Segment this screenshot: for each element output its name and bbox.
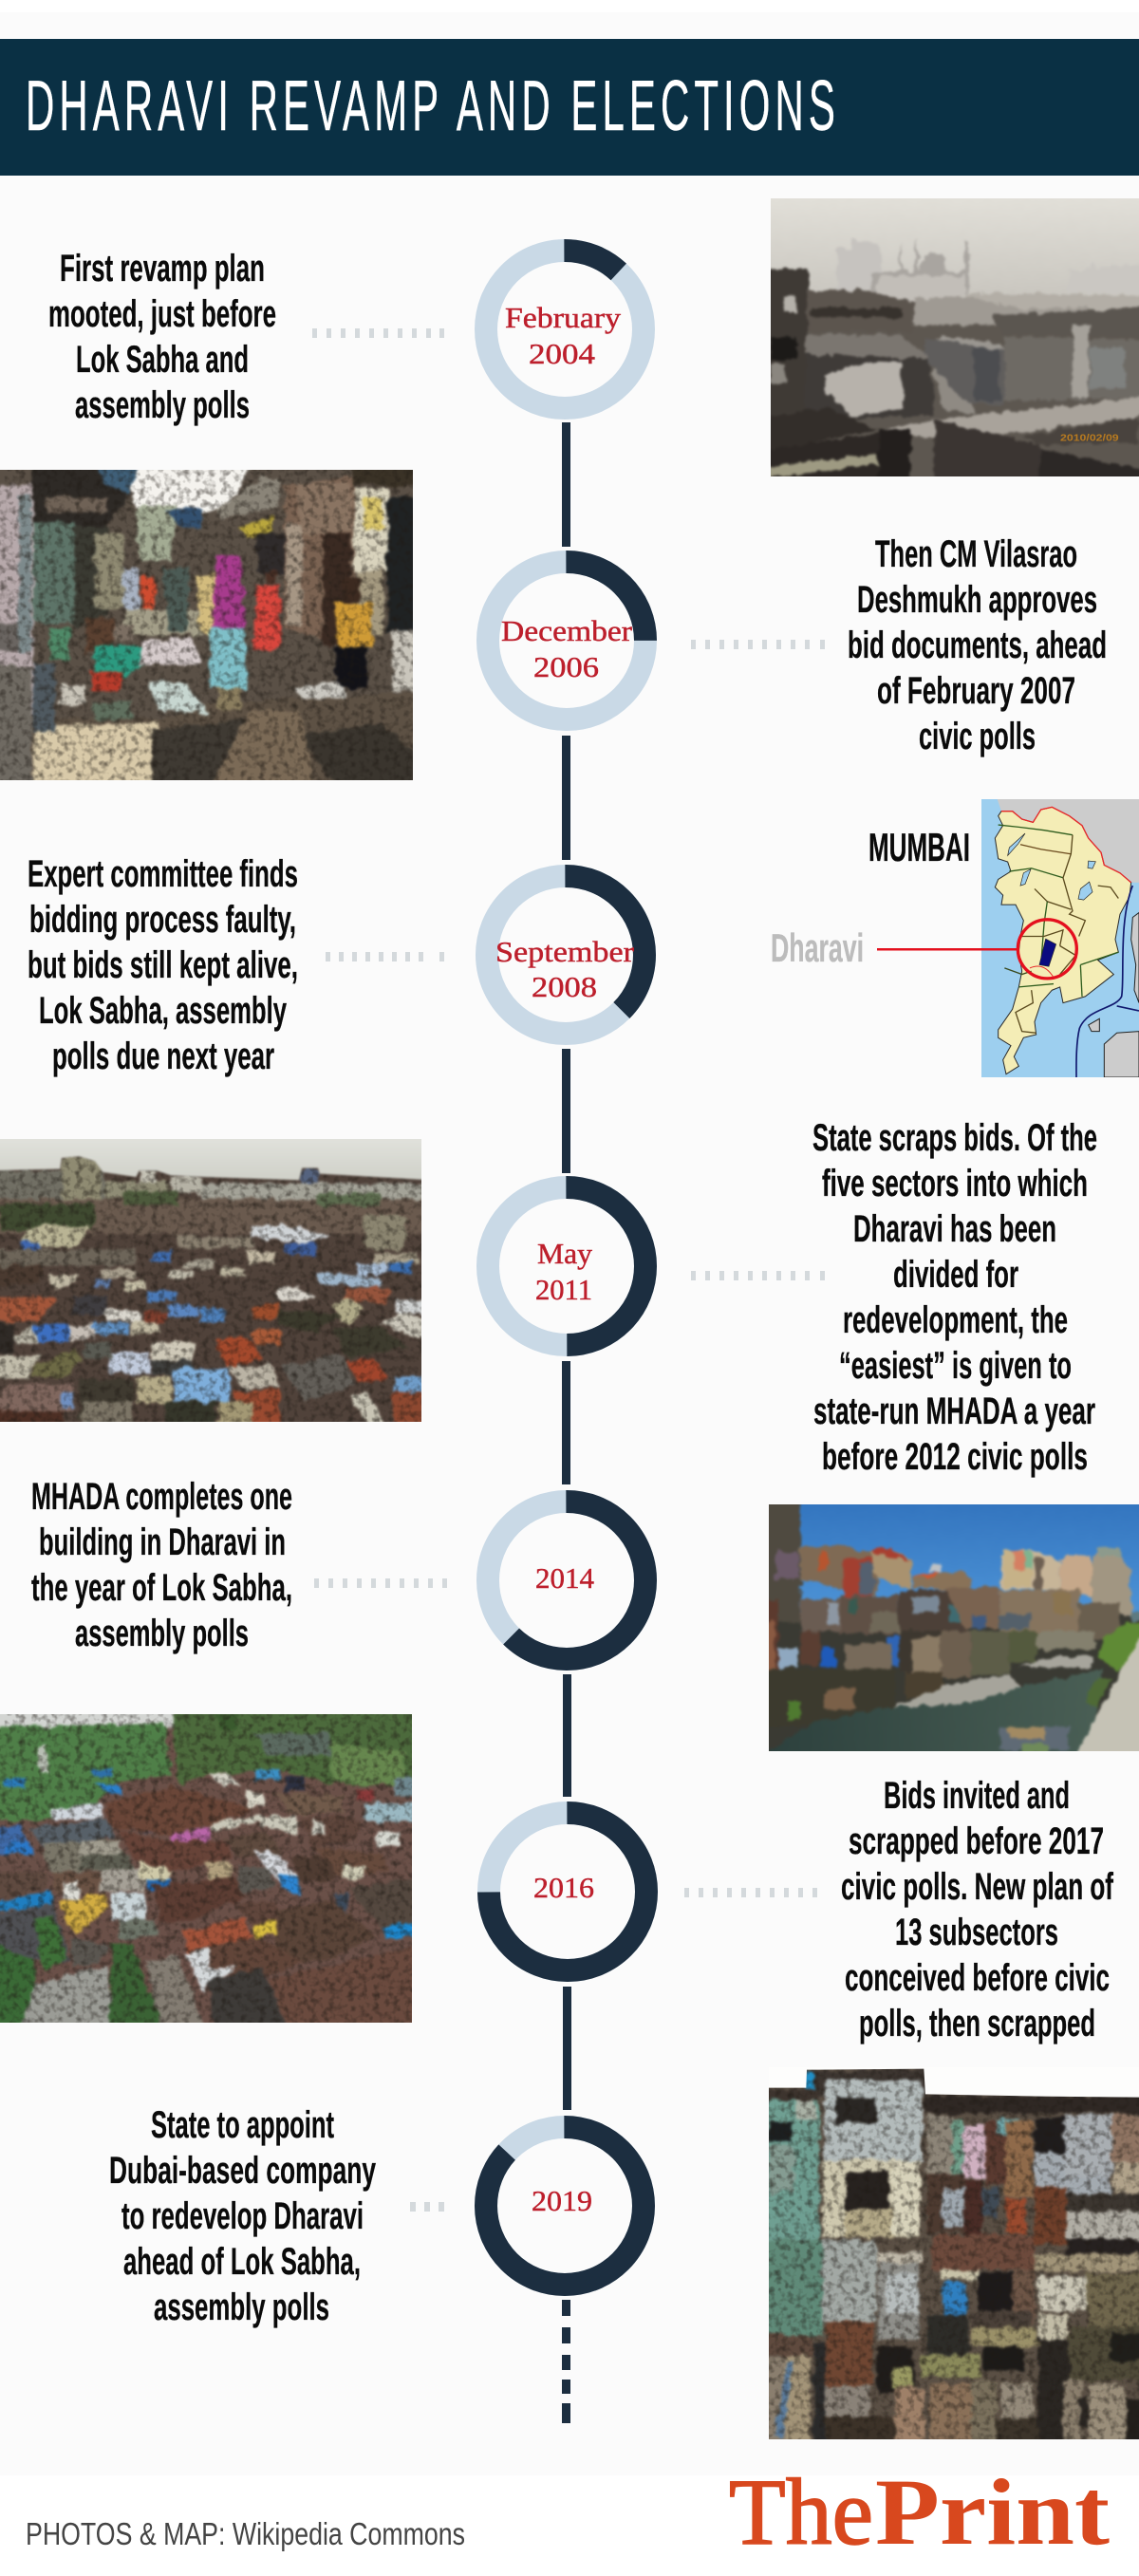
text block: 2014: building in Dharavi in [39, 1521, 286, 1563]
photo: aerial rooftops among trees [0, 1695, 434, 2044]
date label [501, 614, 633, 683]
text block: December 2006 [848, 533, 1107, 757]
milestone ring: December 2006 [488, 562, 645, 719]
milestone ring: May 2011 [488, 1187, 645, 1345]
milestone ring: 2016 [489, 1813, 646, 1970]
date label [535, 1237, 593, 1306]
photo date stamp: 2010/02/09 [1060, 433, 1119, 443]
date label [505, 301, 622, 370]
photo: hazy skyline with mosque [752, 179, 1139, 497]
text block: September 2008: polls due next year [52, 1036, 274, 1077]
date label: September [495, 935, 635, 968]
date label: 2004 [529, 337, 596, 370]
text block: December 2006: civic polls [919, 716, 1036, 757]
map pointer line [877, 948, 1019, 951]
text block: 2019: ahead of Lok Sabha, [123, 2241, 361, 2283]
map label: Mumbai: MUMBAI [868, 825, 970, 869]
text block: 2014 [31, 1476, 292, 1654]
date label: 2019 [532, 2184, 592, 2217]
date label: 2011 [535, 1273, 592, 1306]
text block: September 2008: Lok Sabha, assembly [39, 990, 287, 1032]
photo: crowded lane with shoppers [0, 451, 434, 802]
photo: buildings along a polluted canal [750, 1485, 1139, 1770]
map of Mumbai with Dharavi circled [771, 799, 1139, 1077]
date label: 2014 [535, 1561, 594, 1595]
ThePrint logo: The [729, 2459, 873, 2565]
text block: 2019: Dubai-based company [109, 2150, 376, 2192]
photo: rusted tin shacks [750, 2048, 1139, 2461]
milestone ring: February 2004 [486, 251, 644, 408]
text block: February 2004: mooted, just before [48, 293, 276, 335]
text block: 2019 [109, 2104, 376, 2328]
text block: 2016 [841, 1775, 1113, 2044]
text block: May 2011: divided for [893, 1254, 1018, 1296]
text block: February 2004: First revamp plan [60, 248, 265, 289]
text block: 2019: to redevelop Dharavi [121, 2195, 364, 2237]
text block: September 2008: Expert committee finds [28, 853, 298, 895]
text block: September 2008: but bids still kept alive, [28, 944, 298, 986]
text block: 2019: State to appoint [151, 2104, 334, 2146]
title: DHARAVI REVAMP AND ELECTIONS [26, 65, 835, 145]
text block: 2019: assembly polls [154, 2287, 329, 2328]
text block: February 2004 [48, 248, 276, 426]
milestone ring: 2019 [486, 2127, 644, 2285]
date label: May [537, 1237, 593, 1270]
text block: 2014: the year of Lok Sabha, [31, 1567, 292, 1609]
milestone ring: 2014 [488, 1502, 645, 1659]
date label [495, 935, 635, 1003]
date label: December [501, 614, 633, 647]
text block: 2014: MHADA completes one [31, 1476, 292, 1518]
dotted connectors [312, 328, 825, 2212]
text block: May 2011 [812, 1117, 1097, 1478]
text block: September 2008 [28, 853, 298, 1077]
text block: 2014: assembly polls [75, 1613, 249, 1654]
date label: 2008 [532, 970, 597, 1003]
text block: February 2004: assembly polls [75, 384, 250, 426]
date label: 2016 [533, 1871, 594, 1904]
photo: aerial view of slum rooftops [0, 1120, 443, 1443]
ThePrint logo [729, 2459, 1110, 2565]
milestone ring: September 2008 [487, 876, 644, 1034]
timeline connectors [562, 422, 571, 2423]
map label: Dharavi: Dharavi [771, 925, 864, 970]
date label: February [505, 301, 622, 334]
title banner [0, 39, 1139, 176]
date label: 2006 [533, 650, 599, 683]
text block: September 2008: bidding process faulty, [29, 899, 296, 941]
text block: February 2004: Lok Sabha and [76, 339, 249, 381]
photo credit: PHOTOS & MAP: Wikipedia Commons [26, 2516, 465, 2551]
ThePrint logo: Print [875, 2459, 1110, 2565]
